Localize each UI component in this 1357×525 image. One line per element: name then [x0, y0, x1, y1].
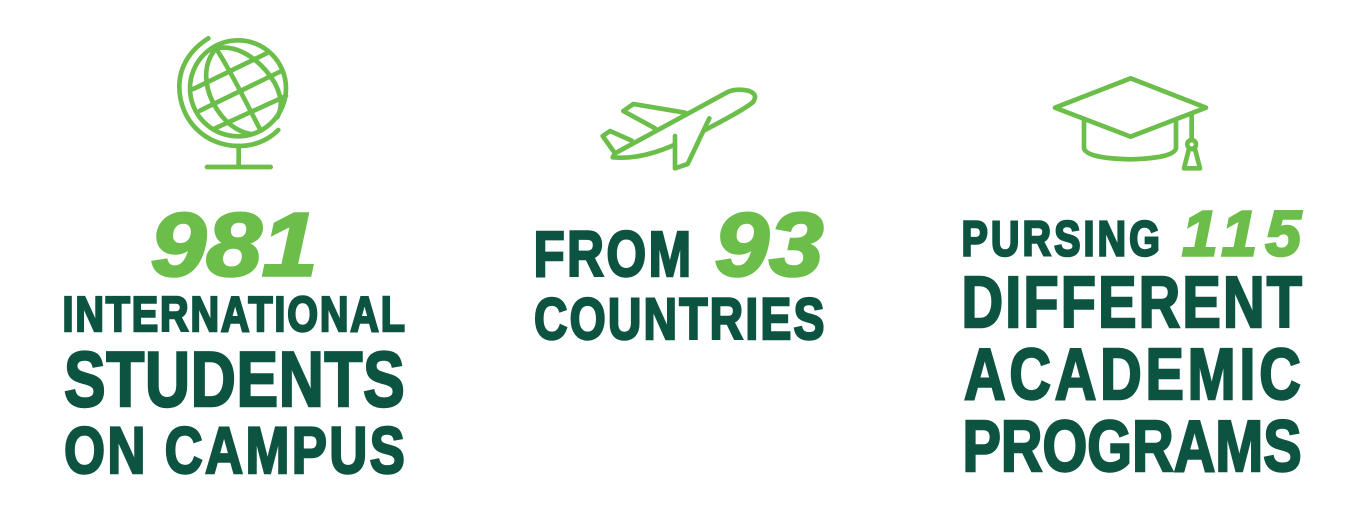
text: DIFFERENT: DIFFERENT [962, 262, 1302, 342]
number: 93: 93 [714, 196, 824, 296]
stat: international students [62, 196, 405, 487]
number: 115: 115 [1182, 198, 1302, 270]
icon: airplane [603, 90, 755, 168]
stat: academic programs [962, 198, 1302, 486]
number: 981: 981 [150, 196, 318, 296]
text: PROGRAMS: PROGRAMS [962, 406, 1302, 486]
text: STUDENTS: STUDENTS [64, 335, 405, 423]
text: FROM: FROM [534, 220, 691, 290]
icon: globe [179, 38, 286, 167]
text: INTERNATIONAL: INTERNATIONAL [62, 287, 405, 342]
icon: graduation cap [1055, 78, 1206, 168]
text: ON CAMPUS: ON CAMPUS [64, 413, 405, 487]
text: PURSING: PURSING [962, 211, 1160, 267]
stat: countries [534, 196, 824, 352]
text: ACADEMIC: ACADEMIC [964, 334, 1301, 414]
text: COUNTRIES: COUNTRIES [534, 287, 824, 352]
